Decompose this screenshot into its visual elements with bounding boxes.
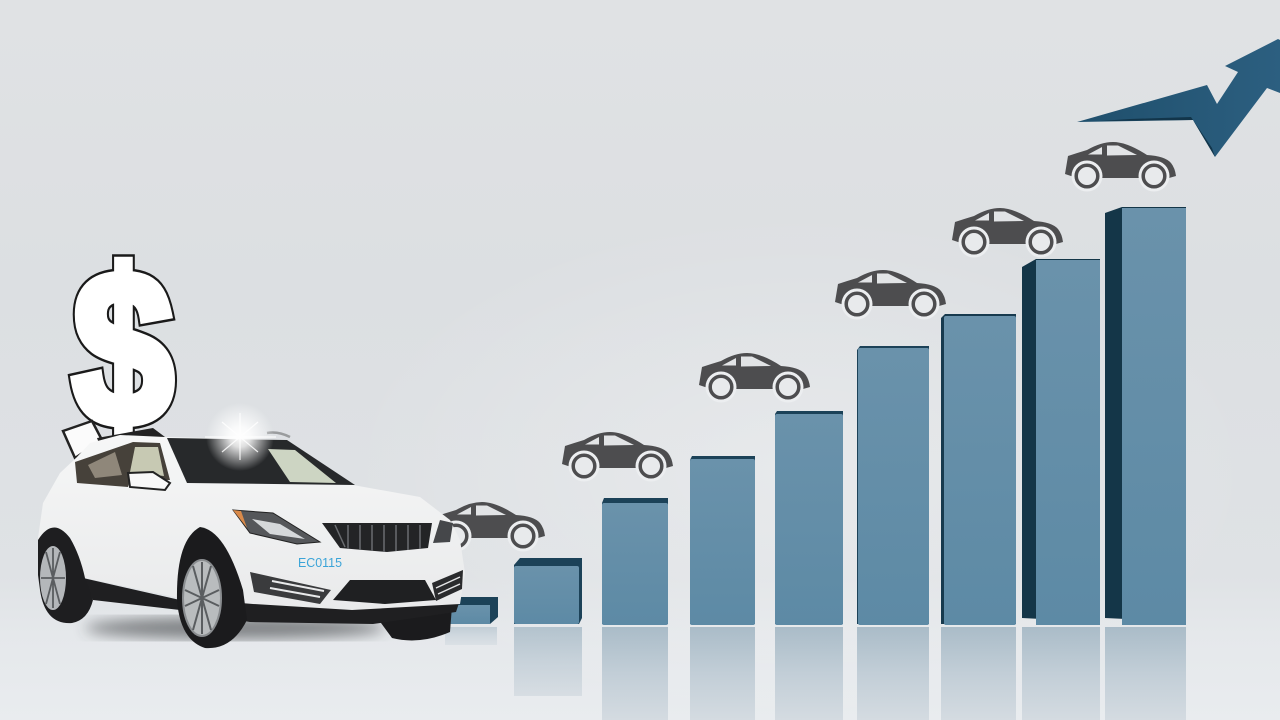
bar 8 — [1022, 259, 1100, 625]
white suv — [38, 403, 465, 648]
rim spokes — [185, 562, 219, 634]
bar 1 — [445, 597, 498, 624]
bar 9 — [1105, 207, 1186, 625]
right headlight — [433, 520, 453, 543]
grille — [322, 523, 432, 552]
icon: small car 1 — [434, 502, 545, 552]
right front tire — [373, 606, 452, 640]
paper flap — [63, 421, 102, 458]
grille slats — [335, 525, 420, 552]
rear spokes — [41, 548, 65, 608]
icon: dollar sign: $ — [73, 228, 173, 471]
left headlight — [233, 510, 320, 544]
headlight lens — [252, 519, 305, 539]
bar 2 — [514, 558, 582, 624]
ground shadow — [85, 617, 385, 639]
amber marker — [233, 510, 247, 528]
plate text: EC0115 — [298, 555, 342, 570]
front rim — [183, 560, 221, 636]
bar 5 — [775, 411, 843, 625]
right fog slats — [436, 577, 460, 594]
body — [38, 435, 465, 610]
arrow: rising trend — [1077, 39, 1280, 157]
icon: small car 2 — [562, 432, 673, 482]
roof sparkle — [205, 403, 276, 471]
window reflection — [130, 447, 164, 476]
mirror — [128, 472, 170, 490]
rear window reflection — [88, 452, 122, 478]
roof outline — [97, 428, 165, 446]
windshield highlight — [268, 449, 336, 483]
icon: small car 6 — [1065, 142, 1176, 192]
right fog light — [432, 570, 463, 601]
side window — [75, 442, 170, 487]
bar reflections — [445, 627, 1186, 720]
lower intake — [333, 580, 436, 604]
fog slats — [270, 581, 324, 597]
icon: small car 5 — [952, 208, 1063, 258]
left fog light — [250, 572, 331, 604]
under chassis — [83, 578, 460, 624]
roof rail — [267, 432, 290, 437]
rear wheel arch and tire — [38, 527, 93, 623]
icon: small car 3 — [699, 353, 810, 402]
front wheel arch and tire — [177, 527, 247, 648]
bar 3 — [602, 498, 668, 625]
bar chart — [445, 207, 1186, 625]
icon: dollar sign: $ — [73, 228, 173, 471]
bar 7 — [941, 314, 1016, 625]
bar 4 — [690, 456, 755, 625]
rear rim — [40, 546, 66, 610]
windshield — [167, 438, 355, 485]
icon: small car 4 — [835, 270, 946, 320]
background glow — [340, 210, 1260, 720]
bar 6 — [857, 346, 929, 625]
